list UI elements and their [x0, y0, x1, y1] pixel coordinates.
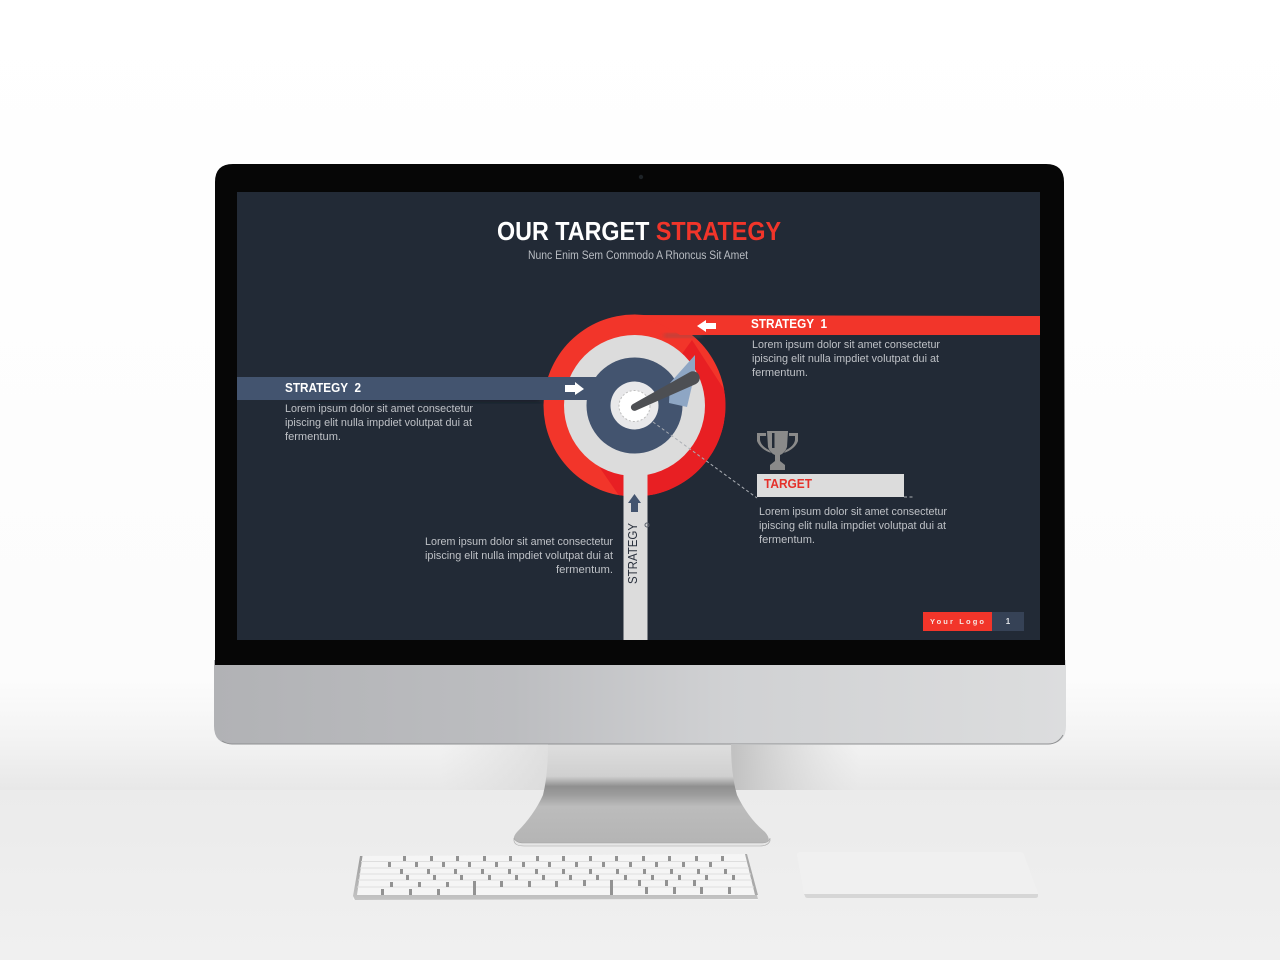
grey ring [564, 335, 705, 476]
keyboard [353, 854, 758, 900]
arrow feathers [669, 355, 695, 407]
ribbon: strategy 2 [237, 377, 600, 402]
text: strategy 2: Lorem ipsum dolor sit amet consectetur [285, 403, 473, 415]
text: strategy 2: fermentum. [285, 431, 341, 443]
monitor stand [514, 744, 770, 846]
title: OUR TARGET STRATEGY [497, 216, 781, 246]
stem bar [624, 470, 648, 640]
text: strategy 1: Lorem ipsum dolor sit amet consectetur [752, 339, 940, 351]
monitor [214, 164, 1066, 744]
key gaps [381, 856, 735, 895]
bullseye [619, 390, 650, 422]
subtitle: Nunc Enim Sem Commodo A Rhoncus Sit Amet [528, 250, 749, 262]
keyboard frame [353, 856, 758, 900]
monitor bezel [215, 164, 1065, 665]
monitor shadow on wall [440, 745, 860, 790]
inner light ring [610, 382, 658, 430]
text: stem description: Lorem ipsum dolor sit amet consectetur [425, 536, 613, 548]
target diagram [544, 314, 914, 500]
text: strategy 1: ipiscing elit nulla impdiet volutpat dui at [752, 353, 940, 365]
icon: trophy [757, 431, 798, 470]
dashed leader line [653, 422, 914, 498]
red band [634, 315, 1040, 335]
text: target: Lorem ipsum dolor sit amet consectetur [759, 506, 947, 518]
monitor chin [214, 660, 1066, 744]
slide screen [237, 192, 1040, 640]
desk surface [0, 790, 1280, 960]
label box [757, 474, 904, 497]
logo box [923, 612, 992, 631]
stem label: STRATEGY [626, 522, 640, 584]
left arrow icon [697, 320, 716, 332]
camera [639, 175, 643, 179]
text: strategy 2: ipiscing elit nulla impdiet volutpat dui at [285, 417, 473, 429]
arrow shaft [631, 371, 700, 411]
up arrow icon [628, 494, 641, 512]
heading: STRATEGY 1 [751, 316, 827, 331]
text: stem description: fermentum. [556, 564, 613, 576]
logo text: Your Logo [930, 617, 984, 626]
page number box [992, 612, 1024, 631]
label text: TARGET [764, 476, 812, 491]
keyboard body [353, 854, 758, 900]
text: target: ipiscing elit nulla impdiet volutpat dui at [759, 520, 947, 532]
heading: STRATEGY 2 [285, 380, 361, 395]
page number: 1 [1006, 617, 1011, 626]
navy band [237, 377, 600, 400]
ribbon shadow [300, 398, 540, 402]
text: strategy 1: fermentum. [752, 367, 808, 379]
strategy stem [624, 470, 649, 640]
key row lines [357, 862, 754, 887]
ribbon: strategy 1 [634, 315, 1040, 337]
ribbon shadow [664, 334, 702, 337]
text: target: fermentum. [759, 534, 815, 546]
text: stem description: ipiscing elit nulla impdiet volutpat dui at [425, 550, 614, 562]
small connector dot [645, 523, 649, 527]
ring shading [600, 340, 727, 500]
right arrow icon [565, 382, 584, 395]
footer logo [923, 612, 1024, 631]
trackpad [797, 852, 1038, 898]
target label [757, 474, 904, 497]
navy ring [586, 358, 682, 454]
outer red ring [544, 314, 726, 496]
